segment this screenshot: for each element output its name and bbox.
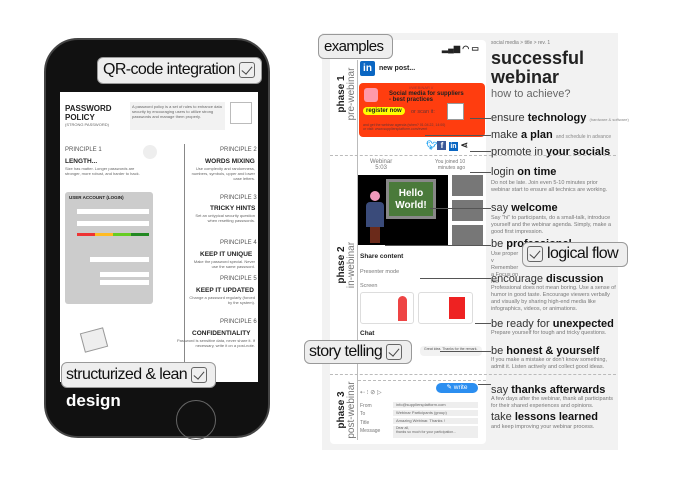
connector lines [470,118,491,119]
social share icons: f [441,141,443,150]
text: say welcome [491,202,558,214]
phone screen: Use complexity and randomness, numbers, symbols, upper and lower case letters. [192,166,255,181]
intro text block [130,102,225,130]
text: Prepare yourself for tough and tricky questions. [491,330,606,336]
user account panel: USER ACCOUNT (LOGIN) [69,195,124,200]
callout: examples [318,34,393,59]
text: login on time [491,166,556,178]
panel: webinar mock screen: info@suppliersplatform.com [396,402,446,407]
panel: webinar mock screen: Presenter mode [360,269,399,275]
text: Professional does not mean boring. Use a sense of humor in good taste. Encourage viewers verbally and visually by sharing high-end media like infographics, videos, or animations. [491,285,616,312]
panel: webinar mock screen: Dear all, [396,426,409,430]
text: promote in your socials [491,146,610,158]
text: Say "hi" to participants, do a small-talk, introduce yourself and the webinar agenda. Simply, make a good first impression. [491,215,611,235]
phone screen: WORDS MIXING [205,158,255,165]
right column: title: webinar [491,67,559,87]
panel: webinar mock screen [330,40,486,444]
text: be professional [491,238,572,250]
status icons: ▂▄▆ ◠ ▭ [442,44,479,53]
text: Do not be late. Join even 5-10 minutes prior webinar start to ensure all technics are working. [491,180,607,193]
phone screen: Make the password special. Never use the same password. [194,259,255,269]
phone screen: Size has matter. Longer passwords are stronger, more robust, and harder to hack. [65,166,140,176]
video frame: hello world: Hello [399,188,423,199]
webinar banner: register now [366,108,402,114]
participant thumbnails [452,175,483,196]
share content: Share content [360,253,403,260]
intro text block: A password policy is a set of rules to enhance data security by encouraging users to utilize strong passwords and manage them properly. [132,104,222,119]
webinar banner: - best practices [389,97,433,103]
text: phase 3 [336,391,347,429]
phone screen: Password is sensitive data, never share it. If necessary, write it on a post-note. [177,338,255,348]
callout: logical flow [522,242,628,267]
webinar timer [370,158,392,171]
callout: story telling [304,340,412,364]
phone screen: TRICKY HINTS [210,205,255,212]
text: in-webinar [346,242,357,288]
design label: design [66,391,121,410]
phone screen: LENGTH... [65,158,97,165]
text: say thanks afterwards [491,384,605,396]
phase labels [336,68,357,120]
panel: webinar mock screen: new post... [379,65,415,72]
text: post-webinar [346,381,357,439]
phase labels: pre-webinar [346,68,357,120]
social share icons: 🐦︎ ⋖ [426,140,468,150]
phone screen: CONFIDENTIALITY [192,330,250,337]
panel: webinar mock screen: ✎ write [446,384,467,391]
panel: webinar mock screen: thanks so much for your participation... [396,430,456,434]
phase labels: phase 1 [336,75,347,113]
home button [176,400,216,440]
user account panel [65,192,153,304]
text: make a plan and schedule in advance [491,129,611,141]
email compose: ⇠ ⁝ ⊘ ▷ [360,390,382,396]
text: be honest & yourself [491,345,599,357]
panel: webinar mock screen: Great idea. Thanks for the remark. [424,347,477,351]
text: phase 2 [336,246,347,284]
webinar banner: or scan it: [411,109,435,115]
webinar banner: //WEBINAR // [409,85,433,90]
panel: webinar mock screen: Message [360,428,380,434]
text: A few days after the webinar, thank all participants for their shared experiences and opinions. [491,396,613,409]
phone screen: PRINCIPLE 5 [220,276,257,282]
phone screen: (STRONG PASSWORD) [65,122,109,127]
callout: QR-code integration: QR-code integration [103,61,235,78]
heading: password policy [65,104,112,122]
right column: title [491,40,584,100]
webinar banner: Social media for suppliers [389,91,464,97]
panel: webinar mock screen: Chat [360,330,374,337]
steps: ensure technology (hardware & software) [491,112,629,124]
panel: webinar mock screen: Title [360,420,369,426]
icon: linkedin [360,61,375,76]
phone screen: PRINCIPLE 3 [220,195,257,201]
panel: webinar mock screen: From [360,403,372,409]
right column: title: social media > title > rev. 1 [491,40,550,46]
principles: PRINCIPLE 1 [65,147,102,153]
panel: webinar mock screen: Screen [360,283,377,289]
text: Use proper v Remember a Focus on mo [491,251,518,285]
text: encourage discussion [491,273,604,285]
video frame: hello world [358,175,448,245]
icon: note [80,327,108,353]
panel: webinar mock screen: To [360,411,365,417]
text: be ready for unexpected [491,318,614,330]
phone screen: Set an untypical security question when resetting passwords. [195,213,255,223]
callout: story telling: story telling [309,343,382,360]
callout: structurized & lean [61,362,216,388]
phone screen: KEEP IT UPDATED [196,287,254,294]
panel: webinar mock screen: You joined 10 [435,159,465,165]
webinar banner [359,83,485,137]
text: If you make a mistake or don't know something, admit it. Listen actively and collect good ideas. [491,357,607,370]
right column: title: how to achieve? [491,88,570,100]
icon: linkedin: in [363,63,372,74]
text: take lessons learned [491,411,598,423]
panel: webinar mock screen: Webinar Participants (group) [396,410,447,415]
phone screen: PRINCIPLE 6 [220,319,257,325]
callout: examples: examples [324,38,383,55]
right column: title: successful [491,48,584,68]
video frame: hello world: World! [395,200,427,211]
heading: password policy: POLICY [65,113,95,122]
callout: structurized & lean: structurized & lean [66,366,187,383]
text: and keep improving your webinar process. [491,424,594,430]
webinar timer: Webinar [370,159,392,165]
phone screen: KEEP IT UNIQUE [200,251,252,258]
webinar timer: 5:03 [375,165,387,171]
webinar banner: or visit: www.suppliersplatform.com/event [363,127,427,131]
social share icons: in [450,143,457,150]
panel: webinar mock screen: minutes ago [438,165,465,171]
callout: logical flow: logical flow [547,245,618,262]
panel: webinar background [322,33,618,450]
callout: QR-code integration [97,57,262,84]
phone screen: PRINCIPLE 2 [220,147,257,153]
phone screen: Change a password regularly (forced by the system). [189,295,255,305]
webinar banner: and get the webinar agenda (when? 01.04.22, 14:00) [363,123,445,127]
phone: password policy [44,38,270,438]
phone screen: PRINCIPLE 4 [220,240,257,246]
panel: webinar mock screen: Amazing Webinar. Thanks ! [396,418,445,423]
phone screen [60,92,258,382]
heading: password policy: PASSWORD [65,104,112,113]
